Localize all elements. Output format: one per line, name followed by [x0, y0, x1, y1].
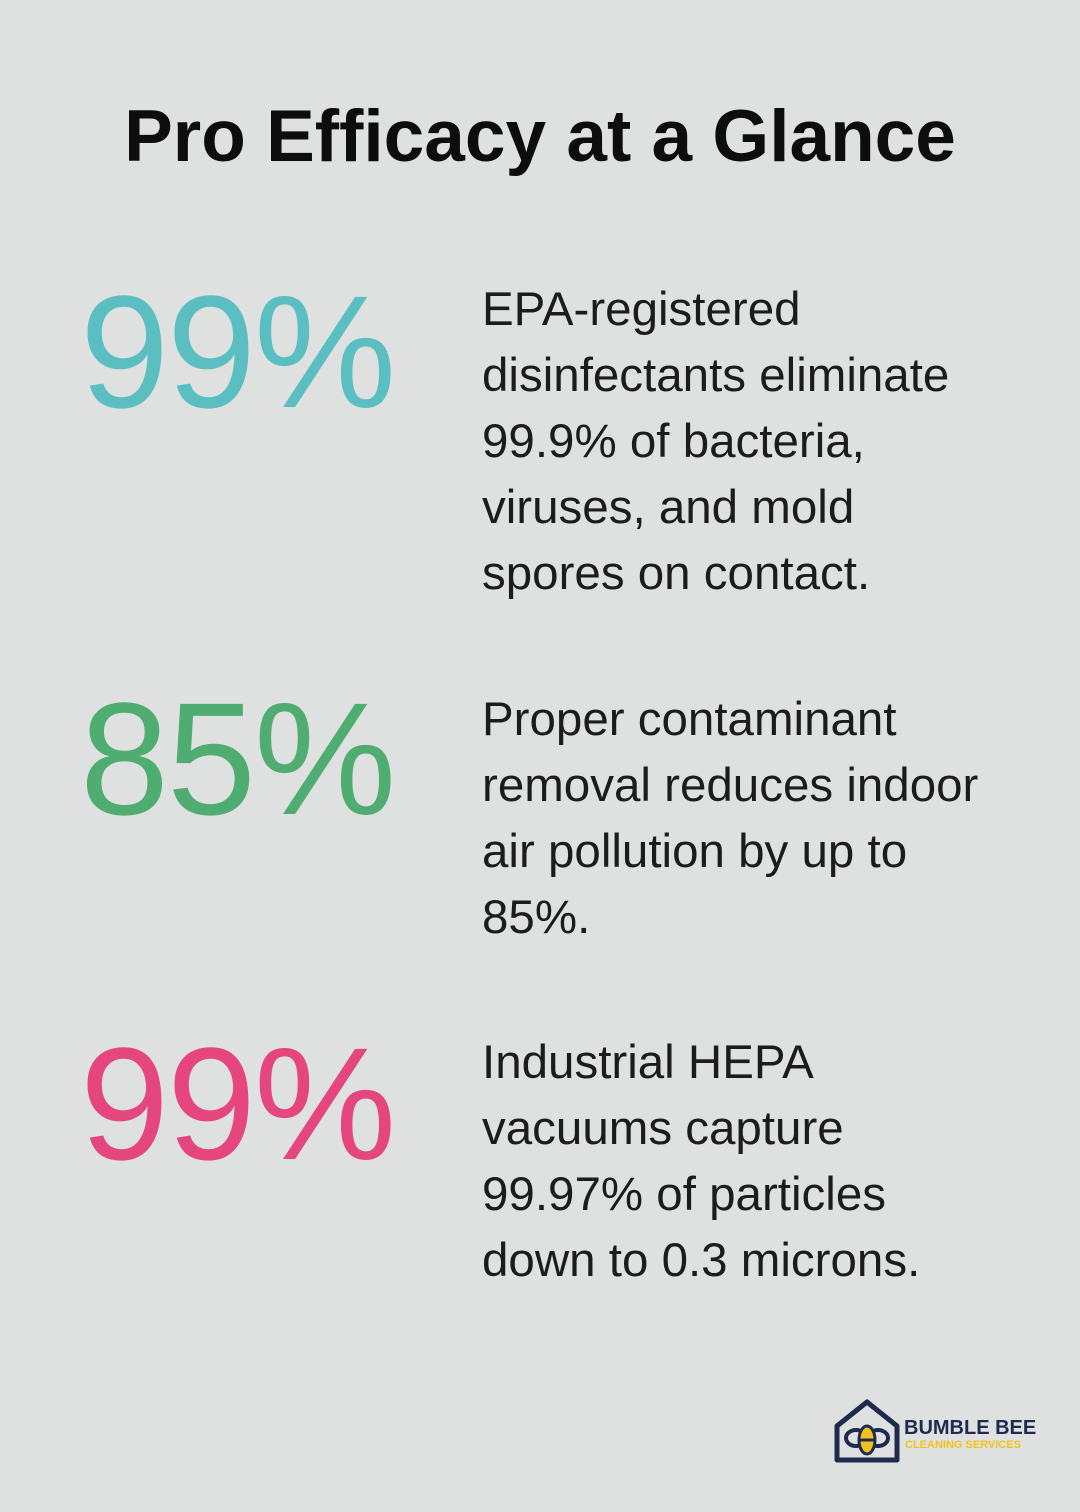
stat 3 text: 99.97% of particles — [482, 1168, 886, 1221]
stat 1 text: EPA-registered — [482, 283, 801, 336]
stat 1 text — [482, 283, 949, 600]
stat 1 text: spores on contact. — [482, 547, 870, 600]
stat 3 text: down to 0.3 microns. — [482, 1234, 920, 1287]
title: Pro Efficacy at a Glance — [124, 96, 956, 177]
stat 2 text — [482, 693, 978, 944]
stat 1 text: 99.9% of bacteria, — [482, 415, 865, 468]
stat 3 text: vacuums capture — [482, 1102, 844, 1155]
stat 2 number: 85% — [80, 669, 394, 848]
stat 1 text: disinfectants eliminate — [482, 349, 949, 402]
logo — [834, 1399, 1036, 1462]
logo: CLEANING SERVICES — [905, 1439, 1021, 1451]
stat 1 text: viruses, and mold — [482, 481, 854, 534]
icon: bee house — [834, 1399, 900, 1462]
stat 2 text: removal reduces indoor — [482, 759, 978, 812]
stat 2 text: Proper contaminant — [482, 693, 897, 746]
stat 3 text: Industrial HEPA — [482, 1036, 814, 1089]
brand text: BUMBLE BEE — [904, 1417, 1036, 1439]
stat 3 number: 99% — [80, 1014, 394, 1193]
stat 1 number: 99% — [80, 262, 394, 441]
stat 2 text: air pollution by up to — [482, 825, 907, 878]
stat 3 text — [482, 1036, 920, 1287]
stat 2 text: 85%. — [482, 891, 590, 944]
